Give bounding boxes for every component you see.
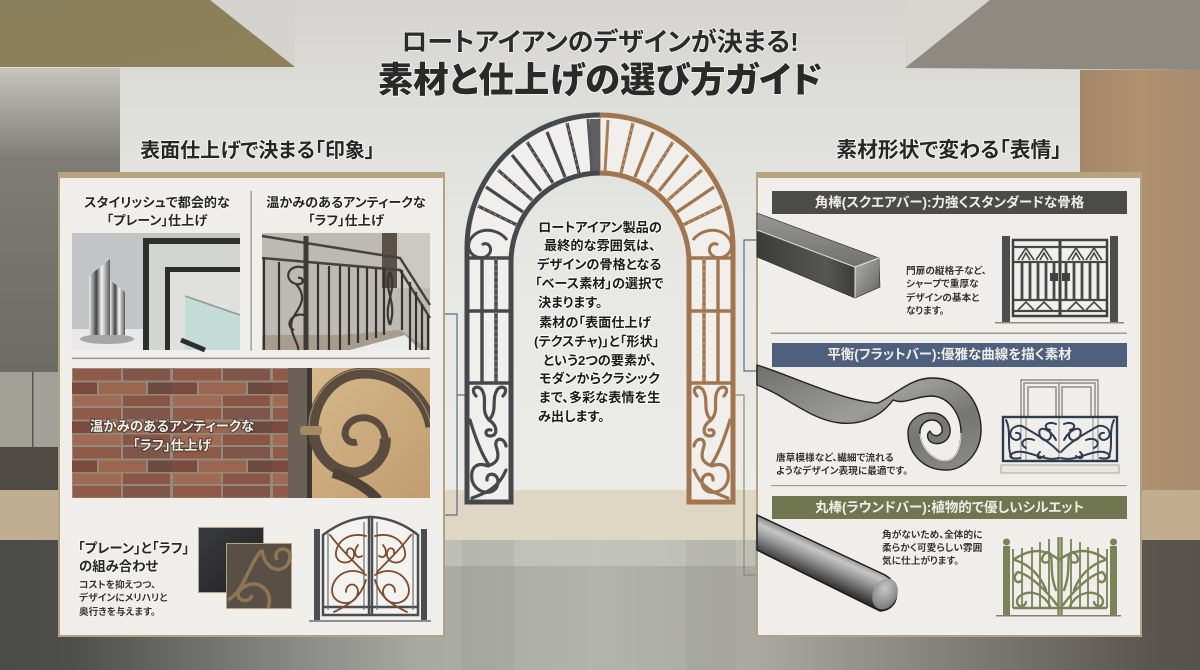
centre description text: 決まります。 [538,295,602,310]
photo: brick wall and iron scroll on wood [72,368,431,500]
connector lines: left [444,314,470,515]
band: square bar [772,191,1127,214]
wrought iron arch [467,115,733,504]
background: left ceiling beam [0,0,295,67]
text: round bar description: 気に仕上がります。 [882,554,959,567]
heading: plain finish: スタイリッシュで都会的な [84,195,230,210]
centre description text: み出します。 [538,409,605,424]
band: square bar: 角棒(スクエアバー):力強くスタンダードな骨格 [815,194,1085,210]
arch: centre keystone [588,119,608,172]
illustration: green gate [996,537,1121,616]
background: right ceiling beam [905,0,1200,70]
text: flat bar description [776,451,908,477]
band: flat bar [772,343,1127,367]
heading: rough finish: 「ラフ」仕上げ [308,212,384,228]
photo caption: 温かみのあるアンティークな [90,419,254,434]
heading: plain finish: 「プレーン」仕上げ [107,212,208,228]
text: combination description: コストを抑えつつ、 [79,578,156,591]
arch: dark iron half [467,115,600,504]
text: combination description: デザインにメリハリと [79,591,168,604]
illustration: round bar [757,515,903,614]
connector lines: right [733,240,756,575]
band: round bar [772,496,1127,519]
heading: rough finish [266,195,426,228]
centre description text: (テクスチャ)」と「形状」 [534,333,659,349]
text: round bar description: 柔らかく可愛らしい雰囲 [882,541,982,554]
panel background [59,173,444,636]
panel: surface finishes [58,172,445,636]
heading: combination: 「プレーン」と「ラフ」 [78,541,189,556]
band: flat bar: 平衡(フラットバー):優雅な曲線を描く素材 [827,346,1072,362]
centre description text [534,220,664,424]
text: square bar description: なります。 [906,305,944,317]
centre description text: モダンからクラシック [539,370,660,386]
text: flat bar description: 唐草模様など、繊細で流れる [776,451,894,464]
text: round bar description: 角がないため、全体的に [882,528,983,541]
text: combination description: 奥行きを与えます。 [79,605,156,618]
text: flat bar description: ようなデザイン表現に最適です。 [776,464,908,477]
text: round bar description [882,528,983,567]
centre description text: 素材の「表面仕上げ [539,314,651,330]
heading: combination: の組み合わせ [79,559,158,574]
swatch: rough bronze [226,544,292,608]
centre description text: という2つの要素が、 [543,352,657,368]
illustration: balcony railing [1001,380,1119,473]
panel background [757,173,1141,636]
title [378,27,822,100]
text: square bar description: デザインの基本と [906,291,980,304]
left section heading: 表面仕上げで決まる「印象」 [140,138,375,162]
centre description text: まで、多彩な表情を生 [539,389,660,405]
photo: plain finish chrome and black frames [72,233,240,350]
heading: plain finish [84,195,230,228]
centre description text: 「ベース素材」の選択で [535,275,664,291]
photo caption: 「ラフ」仕上げ [133,437,212,453]
centre description text: デザインの骨格となる [537,256,661,272]
photo caption [90,419,254,453]
right section heading: 素材形状で変わる「表情」 [836,139,1062,162]
arch: bronze half [600,115,733,504]
text: square bar description: 門扉の縦格子など、 [906,264,986,277]
illustration: square bar gate [995,236,1124,324]
text: combination description [79,578,168,618]
swatch: plain black [198,528,264,592]
centre description text: 最終的な雰囲気は、 [544,237,656,253]
panel: material shapes [756,172,1142,636]
photo: rough finish railing [262,233,430,350]
background: floor reflection of the arch [462,540,736,670]
text: square bar description: シャープで重厚な [906,277,979,290]
illustration: flat bar scroll [757,365,981,470]
illustration: double gate with bronze scrolls [309,517,431,622]
heading: rough finish: 温かみのあるアンティークな [266,195,426,210]
text: square bar description [906,264,986,317]
background: left concrete wall [0,68,120,490]
title line 1: ロートアイアンのデザインが決まる! [401,27,799,57]
background: wood floor strip [0,490,1200,540]
title line 2: 素材と仕上げの選び方ガイド [378,60,822,100]
illustration: square bar [757,213,880,298]
band: round bar: 丸棒(ラウンドバー):植物的で優しいシルエット [815,499,1084,515]
background: concrete floor [0,540,1200,670]
centre description text: ロートアイアン製品の [538,220,662,235]
background: right wood wall [1080,70,1200,490]
heading: combination [78,541,189,574]
